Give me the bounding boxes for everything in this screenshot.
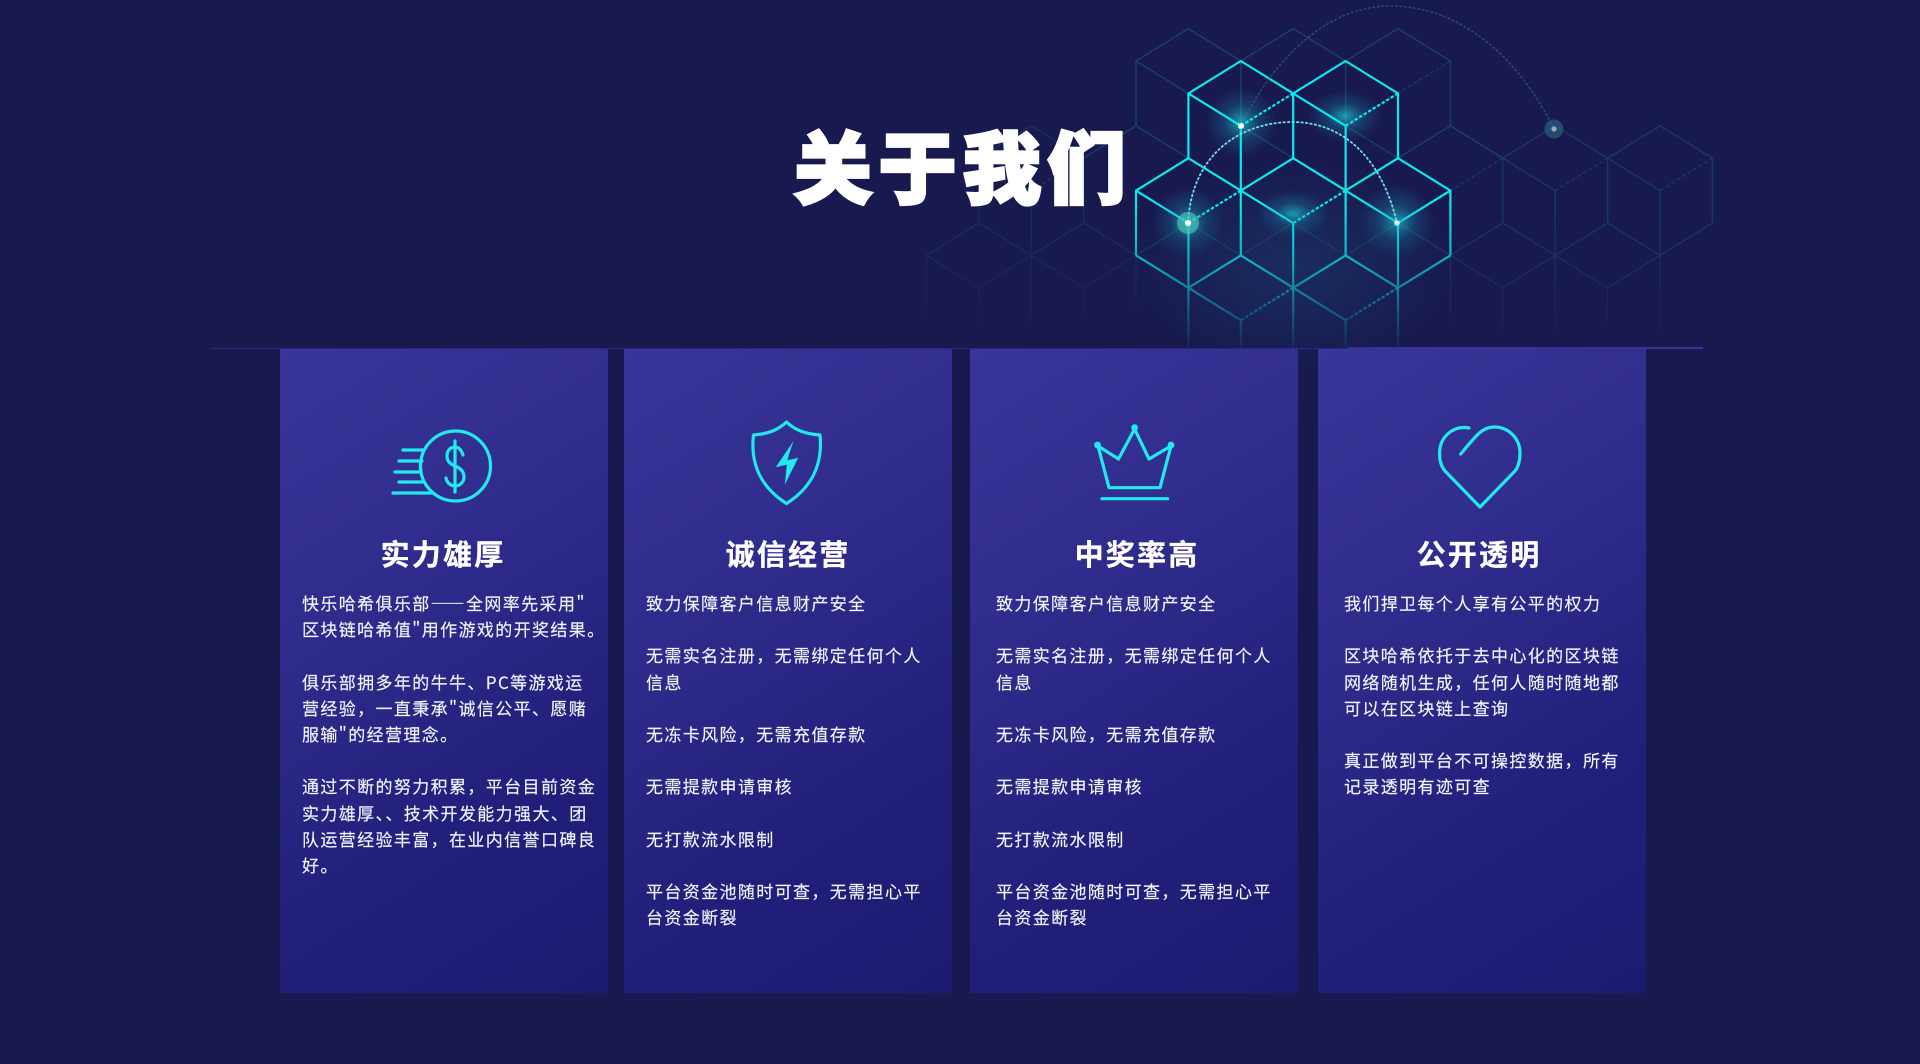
text block: 无需实名注册，无需绑定任何个人 bbox=[646, 642, 922, 667]
heading: 实力雄厚 bbox=[381, 532, 505, 574]
bright cube outlines bbox=[1134, 60, 1452, 348]
title: 关于我们 bbox=[794, 108, 1132, 220]
text block: 真正做到平台不可操控数据，所有 bbox=[1344, 747, 1620, 772]
horizontal rule above the cards bbox=[212, 347, 1703, 349]
icon: open heart bbox=[1438, 425, 1522, 509]
text block: 无需实名注册，无需绑定任何个人 bbox=[996, 642, 1272, 667]
network nodes bbox=[1177, 120, 1564, 234]
text block: 无冻卡风险，无需充值存款 bbox=[996, 721, 1217, 746]
text block: 平台资金池随时可查，无需担心平 bbox=[646, 878, 922, 903]
text block: 俱乐部拥多年的牛牛、PC等游戏运 bbox=[302, 669, 584, 694]
text block: 信息 bbox=[646, 669, 683, 694]
text block: 服输"的经营理念。 bbox=[302, 721, 458, 746]
text block: 通过不断的努力积累，平台目前资金 bbox=[302, 773, 596, 798]
icon: crown bbox=[1094, 424, 1174, 500]
text block: 致力保障客户信息财产安全 bbox=[646, 590, 867, 615]
text block: 致力保障客户信息财产安全 bbox=[996, 590, 1217, 615]
text block: 快乐哈希俱乐部——全网率先采用" bbox=[302, 590, 586, 615]
text block: 区块哈希依托于去中心化的区块链 bbox=[1344, 642, 1620, 667]
text block: 无需提款申请审核 bbox=[646, 773, 793, 798]
panel: 公开透明 bbox=[1318, 349, 1646, 993]
text block: 无需提款申请审核 bbox=[996, 773, 1143, 798]
text block bbox=[646, 590, 922, 929]
text block: 可以在区块链上查询 bbox=[1344, 695, 1509, 720]
text block: 队运营经验丰富，在业内信誉口碑良 bbox=[302, 826, 596, 851]
panel: 诚信经营 bbox=[624, 349, 952, 993]
text block: 网络随机生成，任何人随时随地都 bbox=[1344, 669, 1620, 694]
dotted arcs bbox=[1188, 6, 1554, 223]
heading: 中奖率高 bbox=[1075, 532, 1199, 574]
panel: 实力雄厚 bbox=[280, 349, 608, 993]
text block: 台资金断裂 bbox=[996, 904, 1088, 929]
text block: 我们捍卫每个人享有公平的权力 bbox=[1344, 590, 1601, 615]
text block: 记录透明有迹可查 bbox=[1344, 773, 1491, 798]
text block: 营经验，一直秉承"诚信公平、愿赌 bbox=[302, 695, 587, 720]
text block bbox=[1344, 590, 1620, 798]
text block: 台资金断裂 bbox=[646, 904, 738, 929]
text block bbox=[302, 590, 606, 877]
text block: 信息 bbox=[996, 669, 1033, 694]
icon: dollar coin bbox=[391, 429, 492, 503]
heading: 诚信经营 bbox=[726, 532, 850, 574]
icon: shield with lightning bbox=[751, 420, 822, 506]
panel: 中奖率高 bbox=[970, 349, 1298, 993]
text block: 区块链哈希值"用作游戏的开奖结果。 bbox=[302, 616, 606, 641]
text block: 无打款流水限制 bbox=[996, 826, 1125, 851]
text block: 平台资金池随时可查，无需担心平 bbox=[996, 878, 1272, 903]
text block: 实力雄厚、、技术开发能力强大、团 bbox=[302, 800, 588, 825]
heading: 公开透明 bbox=[1417, 532, 1541, 574]
text block: 无冻卡风险，无需充值存款 bbox=[646, 721, 867, 746]
text block bbox=[996, 590, 1272, 929]
glow behind nodes bbox=[1157, 90, 1430, 252]
text block: 无打款流水限制 bbox=[646, 826, 775, 851]
background hexagon network graphic bbox=[212, 5, 1713, 349]
text block: 好。 bbox=[302, 852, 339, 877]
